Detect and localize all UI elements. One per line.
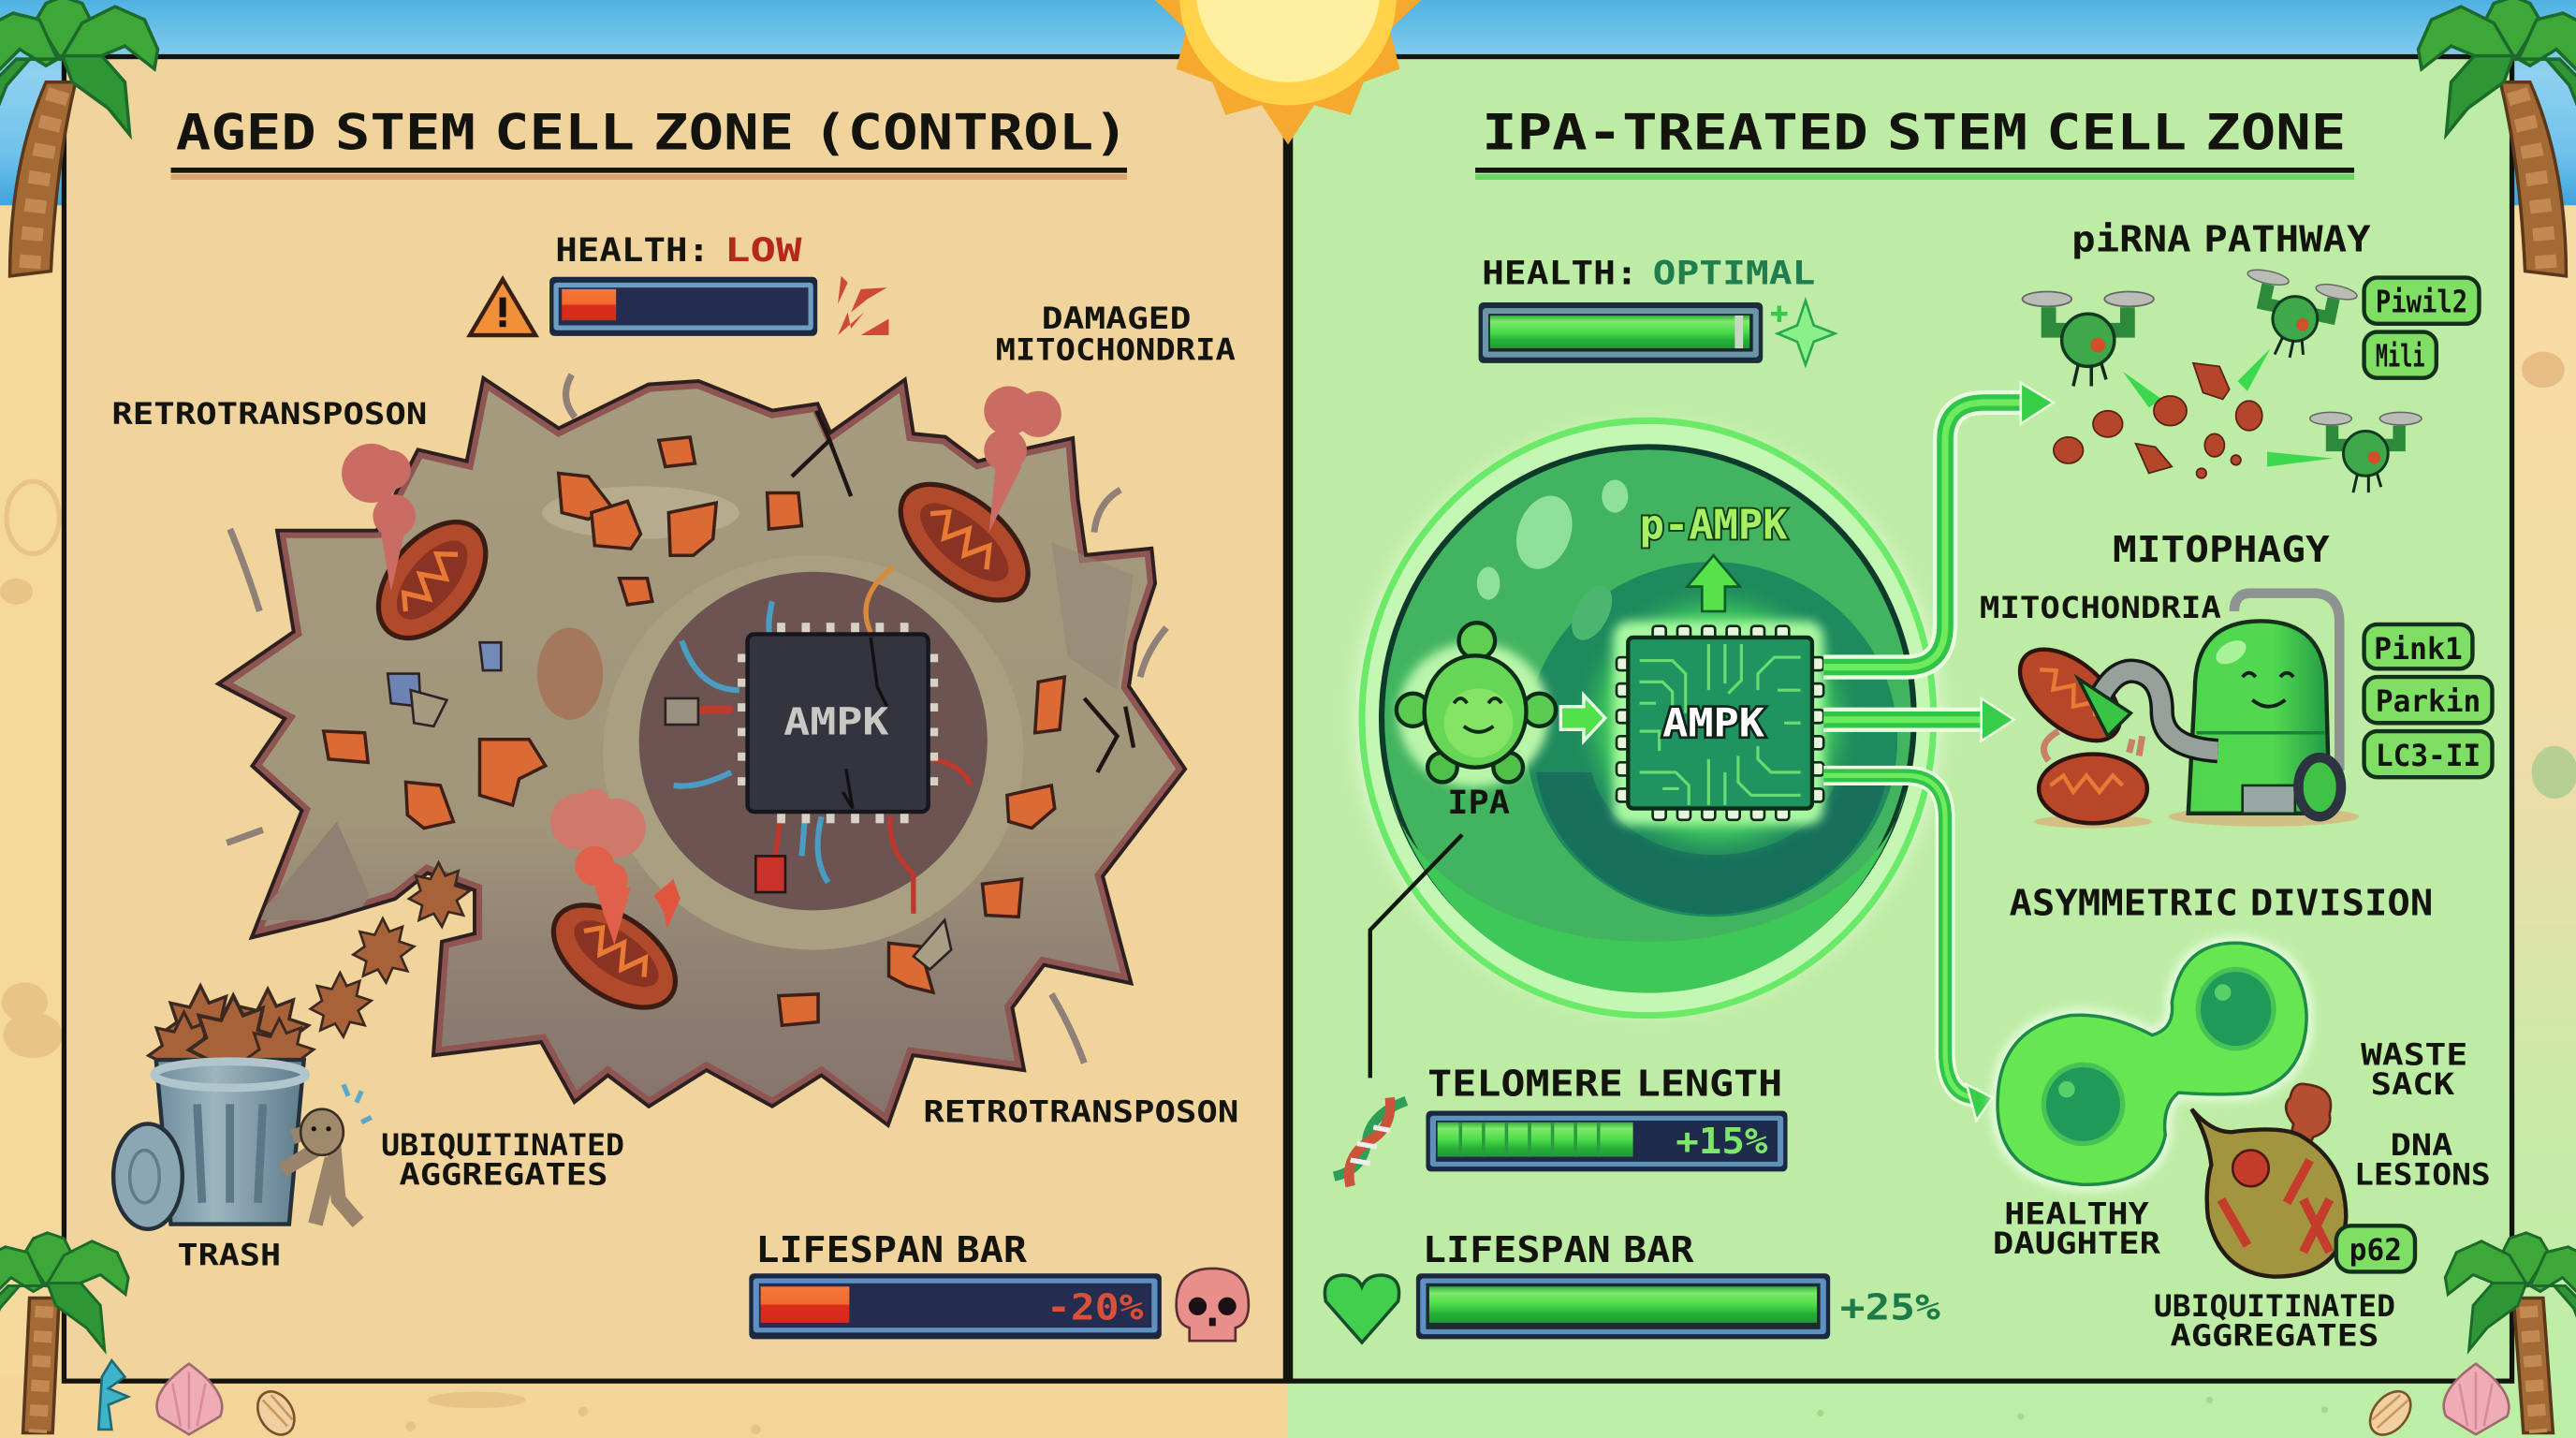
debris: blue and grey chunks: [388, 642, 951, 970]
arrowheads: [1967, 383, 2054, 1121]
label: damaged mitochondria: [996, 302, 1236, 367]
label: ubiquitinated aggregates right: [2154, 1290, 2395, 1353]
mitochondrion 3: [535, 885, 694, 1028]
waste sack: [2191, 1084, 2346, 1277]
dividing cell: [1998, 943, 2306, 1184]
shell tan right: [2362, 1384, 2419, 1438]
lifespan bar: minus 20 percent: [749, 1273, 1162, 1339]
arrow: up to p-AMPK: [1687, 555, 1740, 611]
nucleus: [639, 572, 988, 910]
aggregates flying to trash: [311, 862, 470, 1036]
cell highlights: [1477, 479, 1628, 600]
tag: p62: p62: [2349, 1234, 2402, 1268]
IPA-treated stem cell: [1358, 420, 1937, 1016]
health label: low: LOW: [724, 231, 803, 270]
icon: sun: [1155, 0, 1421, 144]
arrow: IPA to AMPK: [1560, 695, 1605, 741]
mitochondrion 2: [880, 462, 1048, 623]
icon: sparkle: [1771, 301, 1835, 365]
icon: DNA helix: [1334, 1097, 1406, 1186]
tag: Piwil2: Piwil2: [2376, 283, 2467, 319]
health label: optimal: HEALTH:: [1482, 255, 1638, 293]
label: mitophagy: MITOPHAGY: [2113, 529, 2331, 571]
label: trash: TRASH: [178, 1239, 281, 1272]
label: piRNA pathway: piRNA PATHWAY: [2071, 219, 2371, 261]
mitochondrion 1: [358, 502, 506, 658]
label: damaged mitochondria: MITOCHONDRIA: [996, 333, 1236, 367]
label: damaged mitochondria: DAMAGED: [1042, 302, 1191, 336]
label: plus 25 percent: +25%: [1840, 1286, 1940, 1328]
lifespan bar: plus 25 percent: [1416, 1273, 1830, 1339]
telomere bar: plus 15 percent: +15%: [1676, 1121, 1767, 1163]
label: healthy daughter: [1993, 1198, 2161, 1261]
tag: Pink1: [2364, 624, 2472, 668]
drones and targets: [2023, 267, 2422, 492]
tag: Piwil2: [2364, 278, 2479, 324]
smoke plumes: [342, 386, 1061, 945]
shell tan left: [250, 1385, 301, 1438]
label: ubiquitinated aggregates left: [381, 1129, 624, 1192]
label: healthy daughter: DAUGHTER: [1993, 1227, 2161, 1261]
chip: active AMPK: [1614, 621, 1823, 825]
title underline: [171, 168, 1127, 180]
stress marks around cell: [227, 374, 1166, 1064]
tag: p62: [2336, 1225, 2415, 1271]
label: waste sack: WASTE: [2361, 1038, 2467, 1072]
tag: LC3-II: [2364, 731, 2492, 777]
p-AMPK label: p-AMPK: [1640, 502, 1788, 550]
health label: optimal: [1482, 255, 1815, 293]
icon: heart: [1325, 1275, 1399, 1343]
label: retrotransposon bottom: RETROTRANSPOSON: [923, 1096, 1238, 1130]
title: aged zone: AGED STEM CELL ZONE (CONTROL): [176, 105, 1129, 162]
leader line: IPA to telomere: [1370, 835, 1462, 1078]
icon: skull: [1177, 1269, 1249, 1341]
shell pink left: [157, 1364, 222, 1434]
label: DNA lesions: DNA: [2391, 1129, 2452, 1163]
label: lifespan bar right: LIFESPAN BAR: [1423, 1229, 1694, 1271]
icon: warning triangle: [470, 279, 535, 335]
tag: Mili: Mili: [2376, 337, 2425, 374]
label: ubiquitinated aggregates right: UBIQUITINATED: [2154, 1290, 2395, 1324]
IPA character: [1397, 623, 1556, 787]
shell pink right: [2444, 1364, 2509, 1434]
title underline green: [1475, 168, 2354, 180]
label: ubiquitinated aggregates right: AGGREGATES: [2170, 1319, 2378, 1353]
label: telomere length: TELOMERE LENGTH: [1427, 1064, 1782, 1106]
chip: damaged AMPK: AMPK: [783, 700, 889, 744]
title: IPA-treated zone: IPA-TREATED STEM CELL ZONE: [1482, 105, 2346, 162]
vacuum with hose: [2078, 594, 2359, 827]
health label: low: HEALTH:: [555, 231, 710, 270]
tag: Parkin: [2364, 677, 2492, 723]
health label: low: [555, 231, 803, 270]
panel: IPA-treated stem cell zone: [1292, 56, 2512, 1380]
label: DNA lesions: [2354, 1129, 2491, 1192]
tag: Mili: [2364, 332, 2437, 378]
AMPK label active: AMPK: [1662, 699, 1765, 745]
trash can with aggregates and figure: [113, 986, 372, 1229]
panel: aged stem cell zone: [64, 56, 1284, 1380]
protein aggregates (orange chunks): [324, 437, 1064, 1025]
label: asymmetric division: ASYMMETRIC DIVISION: [2009, 883, 2433, 925]
tag: LC3-II: LC3-II: [2376, 740, 2481, 773]
cracks: [792, 411, 1134, 772]
label: DNA lesions: LESIONS: [2354, 1158, 2491, 1192]
label: IPA: IPA: [1447, 784, 1510, 822]
starfish left: [98, 1360, 128, 1430]
icon: red cracks: [838, 276, 889, 335]
label: ubiquitinated aggregates left: AGGREGATES: [399, 1158, 607, 1192]
telomere bar: plus 15 percent: [1426, 1110, 1788, 1171]
label: healthy daughter: HEALTHY: [2004, 1198, 2149, 1232]
palm tree: bottom right: [2445, 1233, 2576, 1432]
label: waste sack: [2361, 1038, 2467, 1102]
tag: Parkin: Parkin: [2376, 685, 2481, 719]
damaged stem cell: [222, 381, 1183, 1123]
label: mitochondria: MITOCHONDRIA: [1980, 592, 2221, 625]
connection arrows from chip: [1823, 403, 2024, 1097]
health label: optimal: OPTIMAL: [1653, 255, 1815, 293]
lifespan bar: minus 20 percent: -20%: [1046, 1286, 1144, 1328]
tag: Pink1: Pink1: [2374, 633, 2463, 667]
label: lifespan bar left: LIFESPAN BAR: [755, 1229, 1028, 1271]
label: retrotransposon top: RETROTRANSPOSON: [111, 398, 427, 432]
chip: damaged AMPK: [666, 567, 971, 914]
label: waste sack: SACK: [2371, 1068, 2454, 1102]
palm tree: bottom left: [0, 1233, 128, 1432]
mitochondria being vacuumed: [2003, 632, 2152, 829]
label: ubiquitinated aggregates left: UBIQUITINATED: [381, 1129, 624, 1163]
health bar: low: [549, 277, 817, 336]
palm tree: top left: [0, 0, 157, 276]
health bar: optimal: [1479, 302, 1763, 363]
palm tree: top right: [2419, 0, 2576, 276]
